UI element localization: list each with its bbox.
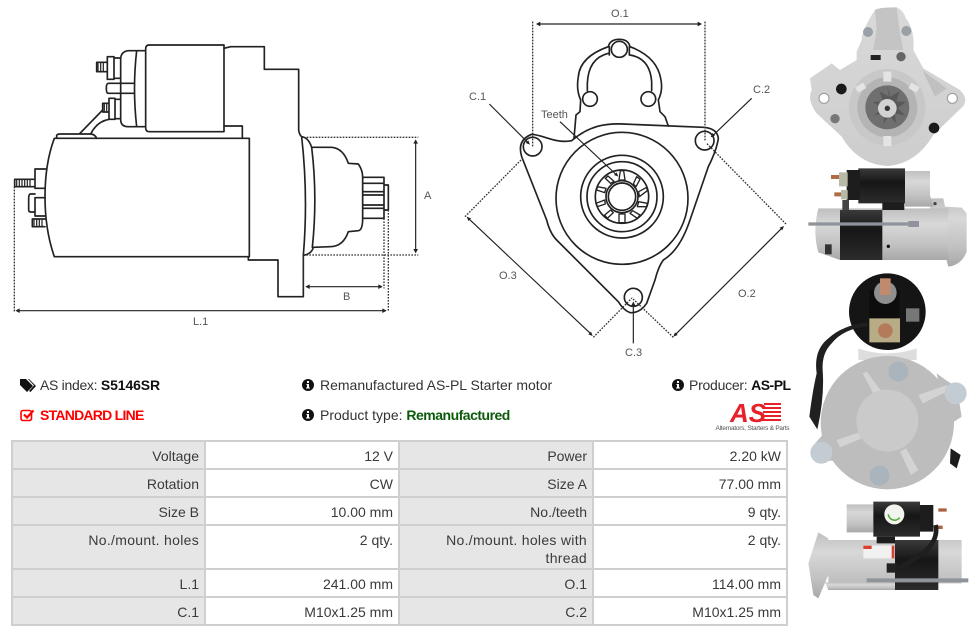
specification table: Size B bbox=[159, 504, 199, 520]
specification table: Voltage bbox=[152, 448, 199, 464]
specification table: 2 qty. bbox=[748, 532, 781, 548]
dimension labels: front view: O.3 bbox=[499, 270, 517, 282]
icon: checkbox bbox=[20, 410, 34, 422]
specification table: Rotation bbox=[147, 476, 199, 492]
AS index: AS index: S5146SR bbox=[40, 377, 160, 393]
dimension lines bbox=[14, 137, 418, 312]
solenoid bbox=[121, 45, 224, 132]
specification table: No./teeth bbox=[530, 504, 587, 520]
holes bbox=[523, 137, 542, 156]
producer: Producer: AS-PL bbox=[689, 377, 791, 393]
specification table: M10x1.25 mm bbox=[304, 604, 393, 620]
dimension labels: side view bbox=[193, 190, 432, 328]
pinion bbox=[363, 177, 388, 218]
pinion rings and teeth bbox=[556, 132, 688, 264]
dimension labels: side view: A bbox=[424, 190, 432, 202]
photo: side view top bbox=[808, 168, 967, 267]
specification table bbox=[11, 440, 788, 626]
photo: rear view bbox=[809, 273, 967, 489]
specification table: Power bbox=[547, 448, 587, 464]
drive housing bbox=[224, 47, 363, 297]
specification table: O.1 bbox=[564, 576, 587, 592]
specification table: M10x1.25 mm bbox=[692, 604, 781, 620]
specification table: L.1 bbox=[180, 576, 199, 592]
specification table: 2.20 kW bbox=[730, 448, 781, 464]
dimension labels: front view: C.3 bbox=[625, 347, 642, 359]
dimension labels: front view: O.2 bbox=[738, 288, 756, 300]
product type: Product type: Remanufactured bbox=[320, 407, 510, 423]
dimension lines bbox=[465, 22, 786, 337]
dimension labels: front view: C.2 bbox=[753, 84, 770, 96]
specification table: 241.00 mm bbox=[323, 576, 393, 592]
photo: side view bottom bbox=[808, 502, 968, 598]
starter body bbox=[45, 138, 249, 257]
dimension labels: front view: Teeth bbox=[541, 109, 568, 121]
icon: info bbox=[302, 409, 314, 421]
specification table: No./mount. holes bbox=[88, 532, 199, 548]
AS logo: Alternators, Starters & Parts bbox=[716, 425, 790, 432]
dimension labels: side view: L.1 bbox=[193, 316, 208, 328]
icon: tags bbox=[20, 379, 36, 392]
dimension labels: front view: O.1 bbox=[611, 8, 629, 20]
specification table: 9 qty. bbox=[748, 504, 781, 520]
icon: info bbox=[302, 379, 314, 391]
icon: info bbox=[672, 379, 684, 391]
specification table: 10.00 mm bbox=[331, 504, 393, 520]
specification table: 77.00 mm bbox=[719, 476, 781, 492]
dimension labels: front view: C.1 bbox=[469, 91, 486, 103]
specification table: CW bbox=[370, 476, 393, 492]
specification table: C.1 bbox=[177, 604, 199, 620]
mounting plate bbox=[520, 124, 718, 313]
specification table: 114.00 mm bbox=[712, 576, 781, 592]
top lug bbox=[574, 39, 668, 138]
product description: Remanufactured AS-PL Starter motor bbox=[320, 377, 552, 393]
specification table: 2 qty. bbox=[360, 532, 393, 548]
specification table: No./mount. holes with thread bbox=[446, 532, 587, 566]
dimension labels: front view bbox=[469, 8, 770, 359]
AS logo bbox=[716, 399, 790, 432]
photo: front flange view bbox=[810, 7, 965, 166]
terminals bbox=[15, 57, 134, 227]
standard line badge: STANDARD LINE bbox=[40, 407, 144, 423]
specification table: 12 V bbox=[364, 448, 393, 464]
front view technical drawing bbox=[465, 8, 786, 359]
specification table: Size A bbox=[547, 476, 587, 492]
dimension labels: side view: B bbox=[343, 291, 350, 303]
specification table: C.2 bbox=[565, 604, 587, 620]
